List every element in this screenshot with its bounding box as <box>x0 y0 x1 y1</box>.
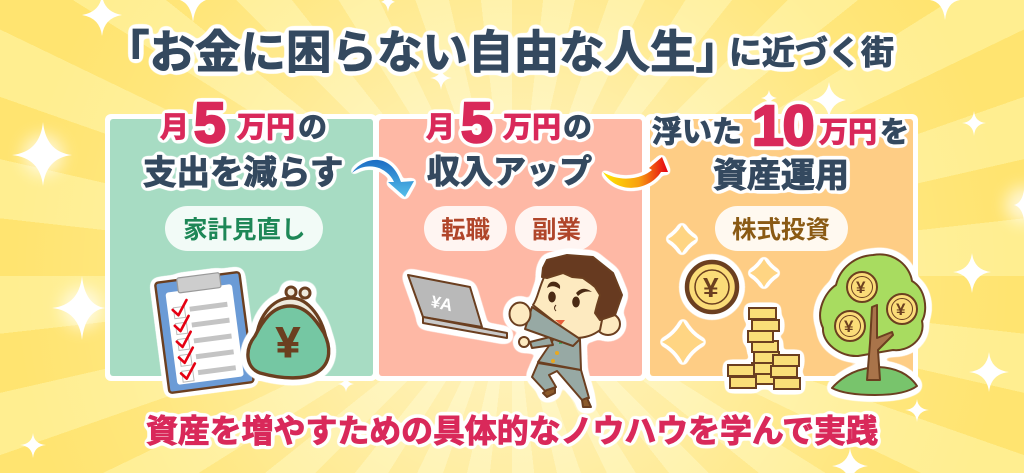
panel: raise income <box>374 114 646 381</box>
coin <box>835 311 865 341</box>
ground <box>832 367 917 395</box>
heading: reduce spending: 万円 <box>237 112 295 144</box>
heading: invest: 資産運用 <box>713 157 849 195</box>
icon: coin purse <box>248 287 329 378</box>
trunk <box>867 305 893 380</box>
heading: raise income: の <box>563 112 592 144</box>
heading: reduce spending: 支出を減らす <box>143 155 343 192</box>
pill: job change: 転職 <box>441 216 490 244</box>
coin: ¥ <box>844 317 854 336</box>
fist <box>510 302 530 326</box>
character: businessman punching <box>510 255 622 407</box>
crown <box>820 254 925 356</box>
pill: side job: 副業 <box>532 216 581 244</box>
heading: raise income: 収入アップ <box>427 153 592 190</box>
pill: stock investment <box>715 206 848 251</box>
heading: invest: 10 <box>752 94 813 158</box>
pill: side job <box>515 206 597 251</box>
heading: reduce spending: 月 <box>160 112 189 144</box>
heading: reduce spending: の <box>298 112 327 144</box>
arrow: blue curved <box>352 160 414 197</box>
nose <box>554 305 556 311</box>
hair <box>542 255 622 320</box>
pill: household review <box>165 206 323 251</box>
front arm <box>525 307 580 346</box>
title: に近づく街 <box>729 34 894 71</box>
icon: coin purse: ¥ <box>276 319 300 367</box>
icon: money tree <box>820 254 925 395</box>
ear <box>596 313 620 335</box>
heading: reduce spending: 5 <box>194 91 226 155</box>
coin <box>847 272 877 302</box>
footer message: 資産を増やすための具体的なノウハウを学んで実践 <box>146 413 878 449</box>
pill: household review: 家計見直し <box>183 216 306 244</box>
coin: ¥ <box>856 278 866 297</box>
torso <box>538 337 581 370</box>
arrow: orange curved <box>603 157 668 188</box>
shoes <box>543 388 591 407</box>
buttons <box>551 351 559 363</box>
icon: laptop: ¥A <box>429 292 454 315</box>
heading: invest: 万円 <box>819 117 877 149</box>
icon: laptop <box>408 275 507 338</box>
eyes and brows <box>547 282 592 308</box>
back hand <box>519 337 529 347</box>
coin <box>887 294 917 324</box>
heading: raise income: 万円 <box>503 112 561 144</box>
heading: reduce spending <box>143 91 343 192</box>
pill: stock investment: 株式投資 <box>732 216 830 244</box>
coin: ¥ <box>896 300 906 319</box>
heading: invest <box>652 94 909 195</box>
heading: raise income <box>426 91 592 190</box>
face <box>533 268 606 338</box>
heading: raise income: 5 <box>461 91 493 155</box>
icon: large yen coin <box>687 262 737 312</box>
mouth <box>555 320 565 325</box>
panel: reduce spending <box>105 114 377 381</box>
icon: large yen coin: ¥ <box>703 272 719 303</box>
icon: clipboard checklist <box>155 270 254 393</box>
heading: invest: を <box>880 117 909 149</box>
back arm <box>530 337 553 348</box>
heading: raise income: 月 <box>426 112 455 144</box>
legs <box>532 363 589 400</box>
tie <box>559 339 562 344</box>
icon: coin stacks <box>728 308 800 389</box>
panel: invest <box>645 114 918 381</box>
heading: invest: 浮いた <box>652 116 742 149</box>
pill: job change <box>424 206 507 251</box>
title: 「お金に困らない自由な人生」 <box>104 27 741 78</box>
sparkle icons <box>662 225 778 363</box>
